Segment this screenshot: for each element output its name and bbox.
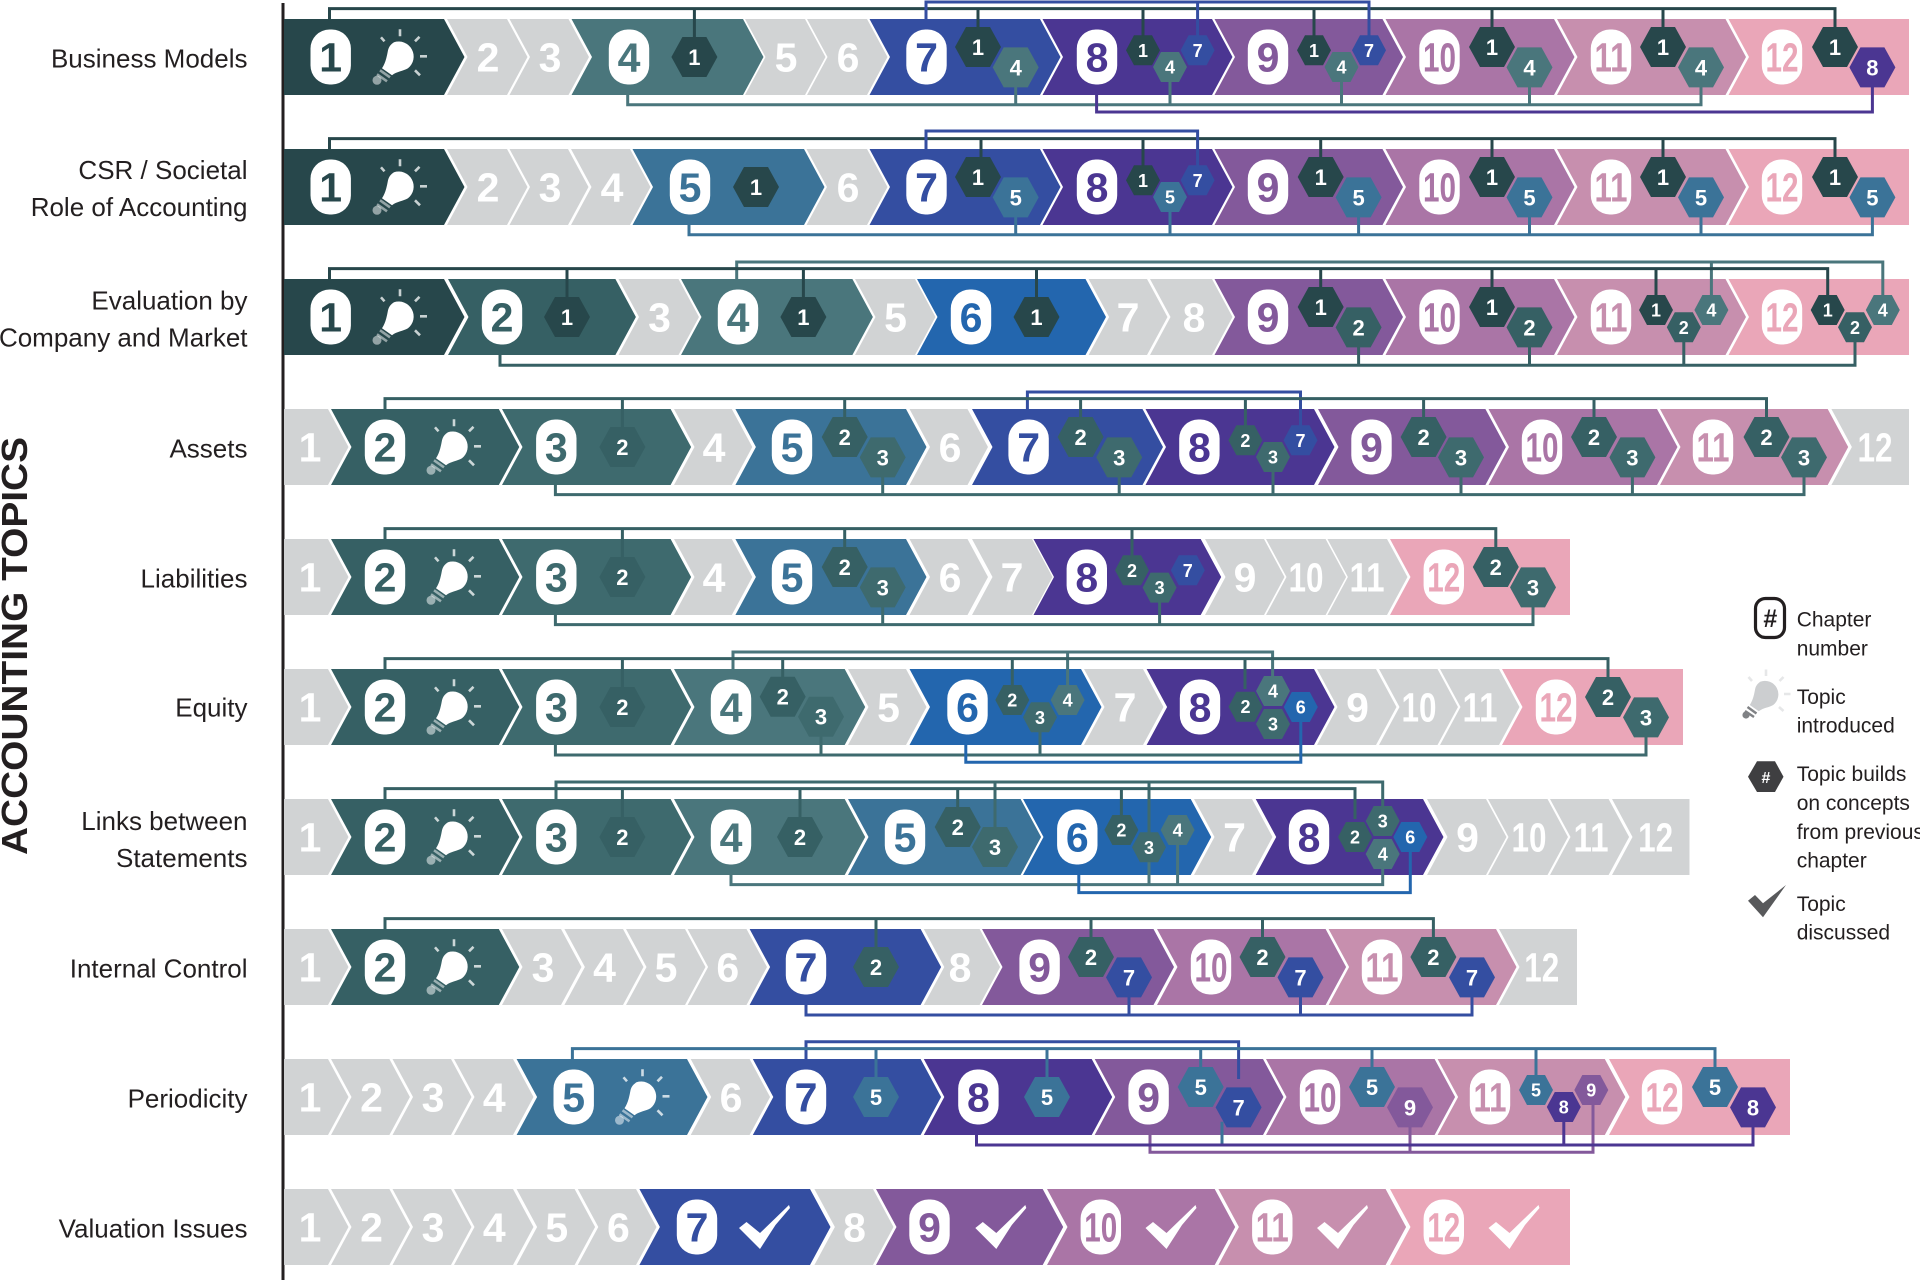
dependency hexagons — [853, 937, 1495, 997]
dependency hexagons: 1 — [688, 45, 701, 70]
dependency hexagons: 1 — [797, 305, 810, 330]
row: Internal Control: 10 — [1194, 944, 1228, 990]
row: Assets: 7 — [1017, 424, 1040, 470]
dependency hexagons: 4 — [1878, 300, 1888, 320]
dependency hexagons: 7 — [1466, 965, 1478, 990]
row: Liabilities: 4 — [703, 554, 726, 600]
row: Links between Statements: 12 — [1638, 814, 1673, 860]
dependency hexagons: 7 — [1294, 965, 1307, 990]
row: Periodicity: 12 — [1646, 1074, 1678, 1120]
dependency hexagons — [544, 287, 1900, 347]
dependency hexagons: 3 — [1113, 445, 1125, 470]
connector lines — [385, 392, 1804, 495]
dependency hexagons: 3 — [989, 835, 1001, 860]
dependency hexagons: 5 — [870, 1085, 882, 1110]
dependency hexagons: 2 — [1679, 318, 1689, 338]
dependency hexagons: 2 — [1602, 685, 1614, 710]
dependency hexagons: 2 — [1240, 697, 1251, 717]
dependency hexagons: 1 — [1657, 35, 1669, 60]
dependency hexagons: 1 — [1651, 300, 1661, 320]
row: Periodicity: 9 — [1137, 1074, 1160, 1120]
row: Evaluation by Company and Market: 4 — [727, 294, 750, 340]
connector lines — [385, 919, 1472, 1015]
dependency hexagons: 2 — [616, 695, 629, 720]
row: Internal Control — [284, 919, 1577, 1015]
dependency hexagons: 2 — [839, 425, 851, 450]
dependency hexagons: 8 — [1747, 1095, 1759, 1120]
dependency hexagons: 4 — [1706, 300, 1716, 320]
row: Valuation Issues: 2 — [360, 1204, 383, 1250]
label: Internal Control: Internal Control — [70, 954, 248, 984]
legend: chapter number: Chapter — [1797, 609, 1871, 632]
row: Links between Statements: 4 — [720, 814, 743, 860]
row: Equity: 8 — [1189, 684, 1211, 730]
row: Internal Control: 8 — [949, 944, 971, 990]
dependency hexagons: 2 — [1116, 820, 1126, 840]
dependency hexagons: 5 — [1366, 1075, 1378, 1100]
row: Equity: 12 — [1540, 684, 1572, 730]
dependency hexagons — [599, 547, 1556, 607]
row: Assets: 2 — [374, 424, 396, 470]
row: Evaluation by Company and Market: 5 — [884, 294, 907, 340]
row: Links between Statements: 10 — [1512, 814, 1546, 860]
row: Assets: 8 — [1188, 424, 1211, 470]
dependency hexagons: 2 — [1085, 945, 1097, 970]
row: Equity: 9 — [1346, 684, 1369, 730]
connector lines — [330, 2, 1872, 112]
row: CSR / Societal Role of Accounting: 7 — [915, 164, 938, 210]
legend: topic discussed: Topic — [1797, 893, 1846, 916]
legend — [1742, 598, 1920, 944]
row: Equity: 7 — [1114, 684, 1136, 730]
row: Equity: 5 — [877, 684, 900, 730]
legend: topic introduced: Topic — [1797, 686, 1846, 709]
dependency hexagons: 4 — [1378, 844, 1388, 864]
row: Assets: 6 — [939, 424, 961, 470]
dependency hexagons: 3 — [1144, 838, 1154, 858]
row: Equity: 4 — [720, 684, 743, 730]
label: Business Models: Business Models — [51, 44, 248, 74]
dependency hexagons — [599, 417, 1827, 477]
label: Evaluation by Company and Market: Company and Market — [0, 322, 248, 352]
row: Equity: 10 — [1402, 684, 1436, 730]
dependency hexagons: 2 — [1074, 425, 1087, 450]
dependency hexagons: 1 — [1823, 300, 1833, 320]
row: Internal Control: 11 — [1366, 944, 1398, 990]
row: Periodicity: 3 — [422, 1074, 444, 1120]
label: Liabilities: Liabilities — [141, 564, 248, 594]
dependency hexagons: 1 — [1030, 305, 1043, 330]
row: Links between Statements: 6 — [1066, 814, 1089, 860]
dependency hexagons: 1 — [561, 305, 573, 330]
row: Evaluation by Company and Market: 6 — [960, 294, 982, 340]
dependency hexagons: 7 — [1193, 41, 1203, 61]
dependency hexagons: 2 — [1588, 425, 1600, 450]
row: Business Models: 2 — [477, 34, 499, 80]
row: Business Models: 3 — [539, 34, 561, 80]
dependency hexagons: 2 — [1850, 318, 1860, 338]
legend: topic introduced: introduced — [1797, 714, 1895, 737]
dependency hexagons: 5 — [1866, 185, 1879, 210]
row: Business Models: 1 — [319, 34, 342, 80]
legend: chapter number: number — [1797, 638, 1868, 661]
dependency hexagons: 1 — [972, 35, 984, 60]
row: CSR / Societal Role of Accounting: 10 — [1423, 164, 1456, 210]
row: Equity: 11 — [1462, 684, 1498, 730]
row: Periodicity: 10 — [1304, 1074, 1336, 1120]
dependency hexagons: 2 — [1352, 315, 1365, 340]
legend: topic discussed — [1748, 885, 1890, 944]
dependency hexagons: 1 — [1829, 165, 1841, 190]
row: Assets: 11 — [1696, 424, 1730, 470]
row: Valuation Issues: 9 — [918, 1204, 941, 1250]
dependency hexagons: 6 — [1296, 698, 1306, 718]
dependency hexagons: 8 — [1559, 1098, 1569, 1118]
row: Business Models: 11 — [1594, 34, 1628, 80]
dependency hexagons — [853, 1067, 1776, 1127]
row: Periodicity: 11 — [1474, 1074, 1506, 1120]
row: Internal Control: 5 — [655, 944, 677, 990]
dependency hexagons: 3 — [1626, 445, 1639, 470]
row: CSR / Societal Role of Accounting: 4 — [601, 164, 624, 210]
dependency hexagons: 6 — [1405, 828, 1415, 848]
dependency hexagons: 7 — [1193, 171, 1203, 191]
row: Liabilities — [284, 529, 1570, 625]
dependency hexagons: 2 — [1240, 431, 1250, 451]
dependency hexagons: 2 — [1490, 555, 1502, 580]
row: Assets: 3 — [545, 424, 568, 470]
row: Valuation Issues: 3 — [422, 1204, 444, 1250]
row: Internal Control: 2 — [374, 944, 396, 990]
row: Liabilities: 9 — [1234, 554, 1256, 600]
dependency hexagons: 7 — [1183, 561, 1193, 581]
dependency hexagons: 1 — [1138, 171, 1148, 191]
dependency hexagons: 3 — [1640, 705, 1652, 730]
row: Valuation Issues: 5 — [545, 1204, 568, 1250]
row: Links between Statements: 11 — [1574, 814, 1608, 860]
row: Periodicity: 6 — [720, 1074, 742, 1120]
dependency hexagons: 5 — [1352, 185, 1365, 210]
dependency hexagons: 4 — [1173, 820, 1183, 840]
dependency hexagons: 4 — [1165, 58, 1175, 78]
dependency hexagons — [733, 157, 1895, 217]
connector lines — [385, 782, 1410, 893]
row: Business Models: 5 — [775, 34, 797, 80]
row: Liabilities: 8 — [1075, 554, 1098, 600]
row: Evaluation by Company and Market: 11 — [1594, 294, 1628, 340]
legend: topic discussed: discussed — [1797, 921, 1890, 944]
dependency hexagons: 2 — [616, 825, 629, 850]
dependency hexagons: 2 — [1523, 315, 1536, 340]
row: Links between Statements — [284, 782, 1690, 893]
legend: topic builds on concepts: chapter — [1797, 849, 1867, 872]
dependency hexagons: 2 — [1007, 690, 1017, 710]
legend: topic builds on concepts: # — [1761, 770, 1770, 787]
dependency hexagons: 5 — [1041, 1085, 1053, 1110]
label: Evaluation by Company and Market: Evaluation by — [91, 286, 248, 316]
dependency hexagons: 5 — [1010, 185, 1022, 210]
row: Liabilities: 1 — [299, 554, 321, 600]
row: Assets: 4 — [703, 424, 726, 470]
dependency hexagons: 2 — [1127, 561, 1137, 581]
connector lines — [572, 1042, 1753, 1152]
dependency hexagons: 1 — [1309, 41, 1319, 61]
dependency hexagons: 5 — [1695, 185, 1707, 210]
dependency hexagons: 5 — [1531, 1080, 1541, 1100]
row: Internal Control: 4 — [593, 944, 616, 990]
row: CSR / Societal Role of Accounting — [284, 131, 1909, 235]
row: Business Models — [284, 2, 1909, 112]
legend: topic builds on concepts: Topic builds — [1797, 763, 1906, 786]
dependency hexagons: 2 — [870, 955, 882, 980]
dependency hexagons: 4 — [1523, 55, 1536, 80]
row: Assets — [284, 392, 1909, 495]
label: CSR / Societal Role of Accounting: Role of Accounting — [31, 192, 248, 222]
dependency hexagons: 7 — [1364, 41, 1374, 61]
dependency hexagons — [599, 676, 1669, 739]
row: CSR / Societal Role of Accounting: 9 — [1257, 164, 1279, 210]
row: Equity: 2 — [374, 684, 396, 730]
dependency hexagons: 3 — [1378, 812, 1388, 832]
dependency hexagons: 3 — [815, 705, 827, 730]
row: Liabilities: 7 — [1001, 554, 1023, 600]
row: Periodicity: 7 — [795, 1074, 817, 1120]
legend: topic introduced — [1742, 670, 1895, 737]
row: Internal Control: 1 — [299, 944, 321, 990]
row: Valuation Issues: 8 — [843, 1204, 866, 1250]
row: Periodicity: 1 — [299, 1074, 321, 1120]
dependency hexagons: 8 — [1866, 55, 1879, 80]
label: Periodicity: Periodicity — [128, 1084, 248, 1114]
row: Links between Statements: 1 — [299, 814, 321, 860]
row: Valuation Issues: 11 — [1256, 1204, 1289, 1250]
label: Links between Statements: Statements — [116, 843, 248, 873]
dependency hexagons: 1 — [972, 165, 984, 190]
connector lines — [385, 652, 1646, 762]
dependency hexagons: 2 — [1350, 828, 1360, 848]
row: CSR / Societal Role of Accounting: 5 — [679, 164, 701, 210]
label: Links between Statements: Links between — [81, 806, 248, 836]
connector lines — [330, 262, 1883, 365]
row: Business Models: 10 — [1423, 34, 1456, 80]
connector lines — [330, 131, 1872, 235]
dependency hexagons: 5 — [1709, 1075, 1721, 1100]
label: Valuation Issues: Valuation Issues — [59, 1214, 248, 1244]
dependency hexagons: 2 — [777, 685, 789, 710]
dependency hexagons: 1 — [1315, 295, 1327, 320]
row: Liabilities: 3 — [545, 554, 568, 600]
row: CSR / Societal Role of Accounting: 8 — [1086, 164, 1108, 210]
label: CSR / Societal Role of Accounting: CSR / Societal — [78, 155, 248, 185]
dependency hexagons: 1 — [1829, 35, 1841, 60]
row: Liabilities: 11 — [1350, 554, 1384, 600]
row: Links between Statements: 7 — [1223, 814, 1246, 860]
row: Liabilities: 12 — [1427, 554, 1460, 600]
row: Internal Control: 6 — [716, 944, 739, 990]
dependency hexagons: 3 — [1268, 714, 1278, 734]
dependency hexagons: 4 — [1268, 682, 1278, 702]
dependency hexagons: 1 — [1486, 295, 1498, 320]
dependency hexagons: 1 — [1657, 165, 1669, 190]
dependency hexagons: 1 — [1315, 165, 1327, 190]
connector lines — [385, 529, 1533, 625]
row: Valuation Issues: 4 — [483, 1204, 506, 1250]
row: Evaluation by Company and Market: 12 — [1766, 294, 1798, 340]
dependency hexagons: 4 — [1063, 690, 1073, 710]
row: Assets: 12 — [1858, 424, 1892, 470]
row: Valuation Issues: 1 — [299, 1204, 321, 1250]
row: Links between Statements: 2 — [374, 814, 396, 860]
dependency hexagons: 3 — [1268, 448, 1278, 468]
row: Business Models: 12 — [1766, 34, 1798, 80]
row: Evaluation by Company and Market: 9 — [1257, 294, 1279, 340]
row: Internal Control: 9 — [1028, 944, 1051, 990]
row: Evaluation by Company and Market: 8 — [1183, 294, 1205, 340]
dependency hexagons: 3 — [1455, 445, 1467, 470]
row: Periodicity: 4 — [483, 1074, 506, 1120]
dependency hexagons: 2 — [616, 565, 629, 590]
row: Links between Statements: 5 — [894, 814, 916, 860]
dependency hexagons: 5 — [1195, 1075, 1207, 1100]
dependency hexagons: 3 — [1155, 578, 1165, 598]
row: Valuation Issues: 7 — [686, 1204, 708, 1250]
row: Business Models: 6 — [837, 34, 859, 80]
row: Equity: 1 — [299, 684, 321, 730]
row: Equity: 3 — [545, 684, 568, 730]
row: Periodicity — [284, 1042, 1790, 1152]
label: Assets: Assets — [169, 434, 248, 464]
row: CSR / Societal Role of Accounting: 1 — [319, 164, 342, 210]
legend: topic builds on concepts — [1748, 761, 1920, 872]
dependency hexagons: 1 — [750, 175, 762, 200]
dependency hexagons: 9 — [1586, 1080, 1596, 1100]
dependency hexagons: 2 — [1417, 425, 1430, 450]
dependency hexagons: 2 — [1256, 945, 1269, 970]
dependency hexagons: 2 — [839, 555, 851, 580]
row: Assets: 10 — [1526, 424, 1558, 470]
row: Business Models: 8 — [1086, 34, 1108, 80]
row: Evaluation by Company and Market: 3 — [648, 294, 671, 340]
row: CSR / Societal Role of Accounting: 2 — [477, 164, 499, 210]
row: CSR / Societal Role of Accounting: 11 — [1594, 164, 1628, 210]
row: Valuation Issues — [284, 1189, 1570, 1265]
row: Evaluation by Company and Market — [284, 262, 1909, 365]
row: Evaluation by Company and Market: 2 — [491, 294, 513, 340]
legend: chapter number: # — [1763, 605, 1777, 633]
row: Valuation Issues: 10 — [1084, 1204, 1117, 1250]
row: Valuation Issues: 6 — [607, 1204, 630, 1250]
dependency hexagons: 4 — [1336, 58, 1347, 78]
row: Equity — [284, 652, 1683, 762]
dependency hexagons: 5 — [1165, 188, 1175, 208]
legend: chapter number — [1756, 598, 1871, 661]
row: Periodicity: 5 — [562, 1074, 585, 1120]
dependency hexagons: 4 — [1010, 55, 1023, 80]
dependency hexagons: 4 — [1695, 55, 1708, 80]
row: Business Models: 7 — [915, 34, 938, 80]
dependency hexagons: 3 — [877, 445, 889, 470]
row: Equity: 6 — [956, 684, 979, 730]
row: Periodicity: 2 — [360, 1074, 383, 1120]
row: Assets: 1 — [299, 424, 321, 470]
dependency hexagons: 2 — [1427, 945, 1440, 970]
row: CSR / Societal Role of Accounting: 6 — [837, 164, 859, 210]
row: Business Models: 9 — [1257, 34, 1279, 80]
dependency hexagons: 2 — [794, 825, 806, 850]
row: Evaluation by Company and Market: 7 — [1117, 294, 1139, 340]
row: Liabilities: 2 — [374, 554, 396, 600]
row: Internal Control: 12 — [1524, 944, 1559, 990]
row: Liabilities: 10 — [1288, 554, 1324, 600]
row: Liabilities: 6 — [939, 554, 961, 600]
row: Valuation Issues: 12 — [1427, 1204, 1460, 1250]
row: Links between Statements: 3 — [545, 814, 568, 860]
dependency hexagons: 7 — [1232, 1095, 1245, 1120]
row: Assets: 5 — [781, 424, 803, 470]
row: Links between Statements: 9 — [1456, 814, 1479, 860]
dependency hexagons: 3 — [1035, 708, 1045, 728]
dependency hexagons — [599, 806, 1427, 869]
dependency hexagons: 1 — [1486, 35, 1498, 60]
row: Business Models: 4 — [618, 34, 641, 80]
legend: topic builds on concepts: on concepts — [1797, 792, 1910, 815]
row: Assets: 9 — [1360, 424, 1383, 470]
axis line — [282, 3, 284, 1280]
dependency hexagons: 2 — [952, 815, 964, 840]
row: CSR / Societal Role of Accounting: 3 — [539, 164, 561, 210]
dependency hexagons: 1 — [1486, 165, 1498, 190]
label: Equity: Equity — [175, 692, 248, 722]
row: Internal Control: 3 — [532, 944, 554, 990]
row: Links between Statements: 8 — [1298, 814, 1320, 860]
dependency hexagons: 1 — [1138, 41, 1148, 61]
dependency hexagons: 9 — [1404, 1095, 1416, 1120]
row: CSR / Societal Role of Accounting: 12 — [1766, 164, 1798, 210]
row: Periodicity: 8 — [967, 1074, 990, 1120]
dependency hexagons: 5 — [1523, 185, 1536, 210]
row: Evaluation by Company and Market: 1 — [319, 294, 342, 340]
dependency hexagons: 7 — [1295, 431, 1306, 451]
dependency hexagons: 2 — [616, 435, 629, 460]
dependency hexagons: 3 — [877, 575, 889, 600]
dependency hexagons: 3 — [1798, 445, 1810, 470]
row: Internal Control: 7 — [795, 944, 817, 990]
dependency hexagons: 3 — [1527, 575, 1539, 600]
dependency hexagons — [671, 27, 1895, 87]
dependency hexagons: 2 — [1760, 425, 1773, 450]
row: Liabilities: 5 — [781, 554, 803, 600]
dependency hexagons: 7 — [1123, 965, 1135, 990]
row: Evaluation by Company and Market: 10 — [1423, 294, 1456, 340]
